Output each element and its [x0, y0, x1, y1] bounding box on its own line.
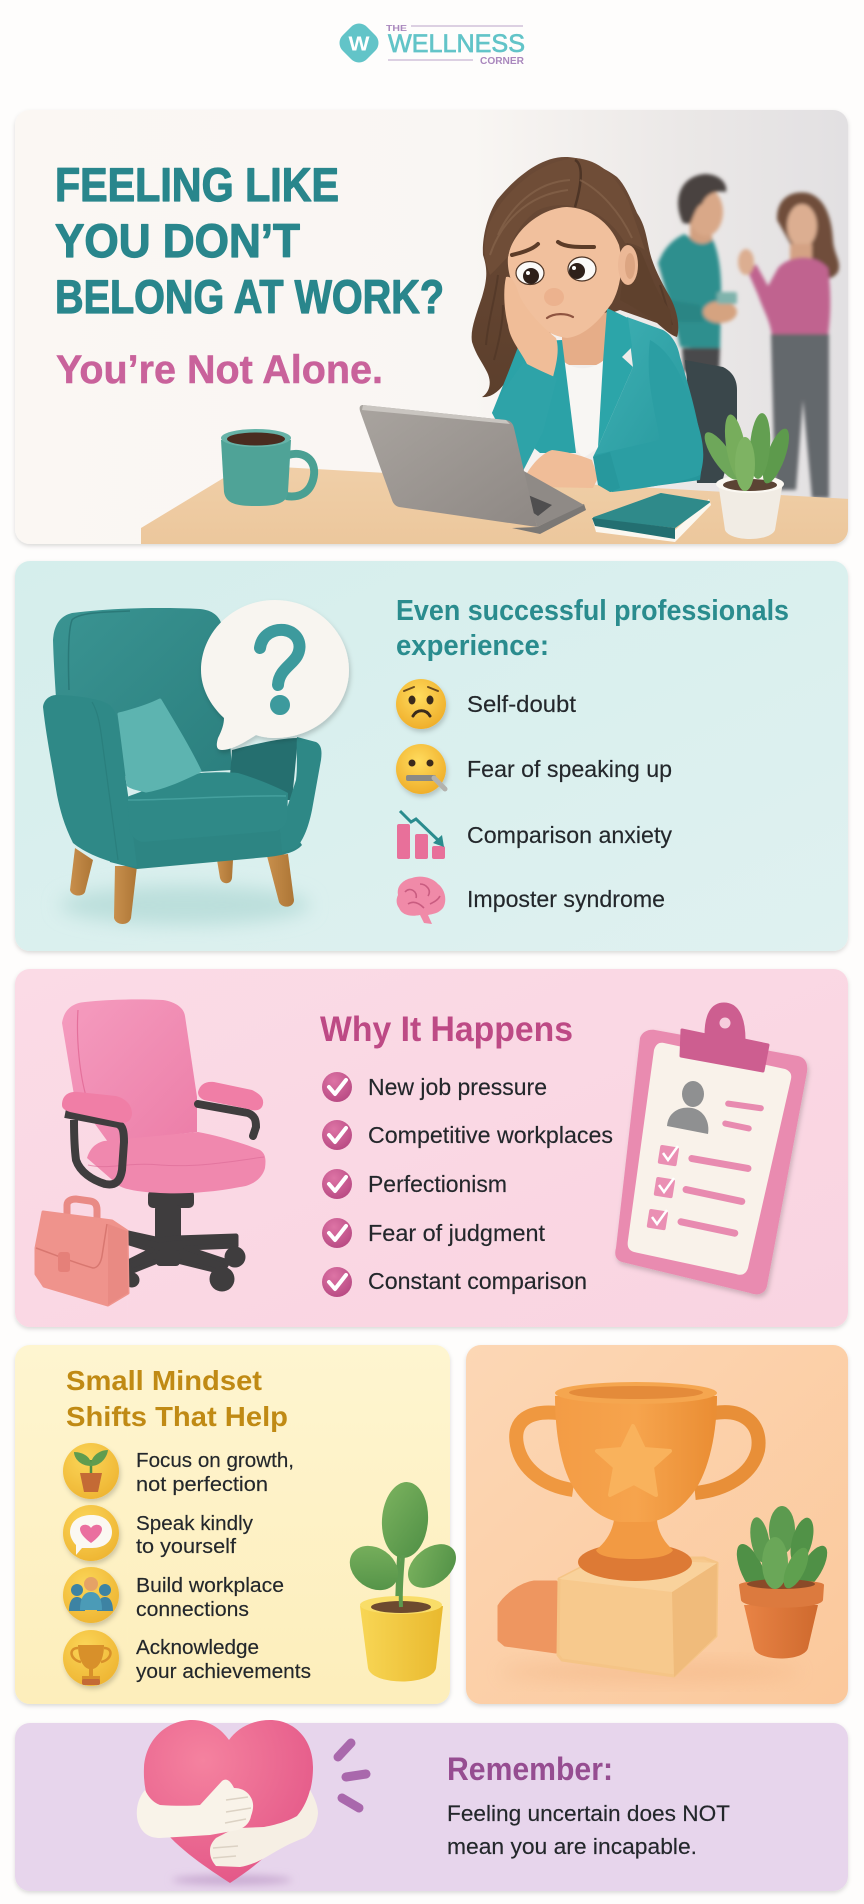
- list item: new job pressure: New job pressure: [368, 1074, 547, 1100]
- blurred colleagues: [658, 174, 839, 498]
- heading: [66, 1365, 288, 1432]
- heading: Even successful professionals: [396, 595, 789, 627]
- heading: hero title: [55, 158, 444, 323]
- icon: logo diamond: [335, 19, 383, 67]
- right arm frame: [198, 1104, 256, 1136]
- seat cushion: [127, 772, 288, 842]
- heading: hero title: FEELING LIKE: [55, 158, 339, 211]
- hair side: [665, 304, 672, 325]
- list item: focus on growth: Focus on growth,: [136, 1449, 294, 1472]
- chair base: [100, 815, 302, 869]
- small orange block: [499, 1582, 556, 1652]
- list item: fear of judgment: Fear of judgment: [368, 1220, 546, 1246]
- message: mean you are incapable.: [447, 1834, 697, 1859]
- heading: hero title: YOU DON’T: [55, 214, 300, 267]
- lower arm and hand: [210, 1790, 318, 1867]
- chair base and wheels: [124, 1190, 246, 1292]
- icon: zipped mouth face: [396, 744, 446, 794]
- list item: imposter syndrome: [397, 877, 665, 924]
- heading: [396, 595, 789, 662]
- icon: falling bar chart: [397, 811, 445, 859]
- right sleeve: [594, 340, 703, 492]
- icon: brain: [397, 877, 445, 924]
- list item: build connections: [63, 1567, 284, 1623]
- clipboard: [615, 1004, 807, 1294]
- dark office chair: [685, 360, 737, 483]
- list item: focus on growth: [63, 1443, 294, 1499]
- hair back: [472, 157, 678, 397]
- icon: group of people: [63, 1567, 119, 1623]
- list item: focus on growth: not perfection: [136, 1473, 268, 1496]
- icon: mini trophy: [63, 1630, 119, 1686]
- list item: imposter syndrome: Imposter syndrome: [467, 886, 665, 912]
- list item: build connections: Build workplace: [136, 1574, 284, 1597]
- list item: speak kindly: Speak kindly: [136, 1512, 254, 1535]
- man torso: [658, 234, 721, 350]
- list: reasons: [322, 1072, 613, 1297]
- armrests: [62, 1092, 132, 1123]
- speech bubble with question mark: [201, 600, 349, 750]
- heading: hero title: BELONG AT WORK?: [55, 270, 444, 323]
- nose and mouth: [544, 288, 564, 306]
- list item: comparison anxiety: [397, 811, 672, 859]
- checkbox rows: [647, 1100, 764, 1237]
- icon: seedling: [63, 1443, 119, 1499]
- message: Feeling uncertain does NOT: [447, 1801, 730, 1826]
- hugging arms: [137, 1780, 318, 1867]
- panel: why it happens: [15, 969, 848, 1327]
- hand on cheek: [504, 277, 558, 377]
- chair backrest: [62, 999, 197, 1142]
- subheading: You're Not Alone: You’re Not Alone.: [56, 348, 383, 392]
- dashes: [338, 1743, 366, 1808]
- list item: fear of judgment: [322, 1218, 546, 1248]
- logo text: WELLNESS: [388, 30, 525, 58]
- white shirt: [564, 360, 604, 450]
- woman in pink: [777, 192, 839, 279]
- list item: fear of speaking up: Fear of speaking up: [467, 756, 672, 782]
- lapel: [598, 308, 633, 447]
- neck: [562, 312, 607, 365]
- book: [592, 494, 711, 542]
- trophy cup: [555, 1396, 717, 1522]
- list item: acknowledge achievements: [63, 1630, 311, 1686]
- hair front: [484, 158, 645, 275]
- person icon: [667, 1081, 708, 1134]
- seated woman: [472, 157, 703, 492]
- laptop: [360, 405, 586, 534]
- list item: self-doubt: Self-doubt: [467, 691, 577, 717]
- icon: question mark: [260, 630, 299, 710]
- list item: build connections: connections: [136, 1598, 249, 1621]
- panel: remember: [15, 1720, 848, 1891]
- heading: Why It Happens: [320, 1010, 573, 1049]
- chair back: [53, 608, 232, 780]
- chair seat: [87, 1132, 265, 1193]
- face: [508, 207, 621, 338]
- jacket right body: [593, 317, 703, 492]
- terracotta plant: [731, 1506, 833, 1658]
- yellow potted plant: [341, 1480, 464, 1682]
- briefcase: [36, 1199, 128, 1305]
- heading: Remember:: [447, 1751, 613, 1787]
- list item: new job pressure: [322, 1072, 547, 1102]
- logo text: CORNER: [480, 56, 525, 67]
- list item: fear of speaking up: [396, 744, 672, 794]
- panel: small mindset shifts: [15, 1345, 450, 1704]
- list item: acknowledge achievements: Acknowledge: [136, 1636, 259, 1659]
- desk: [141, 465, 850, 546]
- panel: successful professionals: [15, 561, 848, 951]
- jacket left: [492, 340, 576, 453]
- message: [447, 1801, 730, 1859]
- icon: worried face: [396, 679, 446, 729]
- eyes: [516, 262, 544, 284]
- left arm frame: [65, 1114, 124, 1184]
- hand on desk: [527, 450, 598, 488]
- star emblem: [597, 1426, 670, 1495]
- list item: speak kindly: [63, 1505, 254, 1561]
- list item: acknowledge achievements: your achievements: [136, 1660, 311, 1683]
- clipboard clip: [681, 1004, 768, 1071]
- trophy handles: [516, 1412, 573, 1490]
- brows: [512, 244, 538, 255]
- logo: [335, 19, 525, 67]
- pedestal block: [558, 1558, 717, 1677]
- logo text: THE: [386, 23, 407, 33]
- heading: Small Mindset: [66, 1365, 262, 1396]
- list item: competitive workplaces: Competitive workplaces: [368, 1122, 613, 1148]
- panel: hero: [15, 110, 850, 546]
- icon: logo diamond: W: [348, 34, 370, 56]
- list item: perfectionism: Perfectionism: [368, 1171, 507, 1197]
- pillow: [119, 700, 200, 791]
- heading: experience:: [396, 630, 549, 662]
- panel: trophy illustration: [466, 1345, 848, 1704]
- list item: self-doubt: [396, 679, 577, 729]
- teal armchair: [43, 600, 349, 924]
- icon: heart bubble: [63, 1505, 119, 1561]
- list item: comparison anxiety: Comparison anxiety: [467, 822, 672, 848]
- list item: perfectionism: [322, 1169, 507, 1199]
- trophy base: [578, 1543, 692, 1581]
- upper arm and hand: [137, 1780, 253, 1838]
- pink office chair: [62, 999, 265, 1292]
- icon: hugged heart: [137, 1720, 366, 1883]
- list item: constant comparison: Constant comparison: [368, 1268, 587, 1294]
- logo text: [386, 23, 525, 67]
- potted plant: [704, 413, 789, 539]
- right arm: [280, 737, 321, 852]
- left arm: [43, 695, 137, 867]
- inner right arm: [228, 738, 298, 800]
- trophy: [516, 1382, 759, 1581]
- chair legs: [70, 848, 294, 924]
- list item: speak kindly: to yourself: [136, 1535, 236, 1558]
- coffee mug: [221, 429, 314, 506]
- heading: Shifts That Help: [66, 1401, 288, 1432]
- left sleeve: [492, 368, 554, 470]
